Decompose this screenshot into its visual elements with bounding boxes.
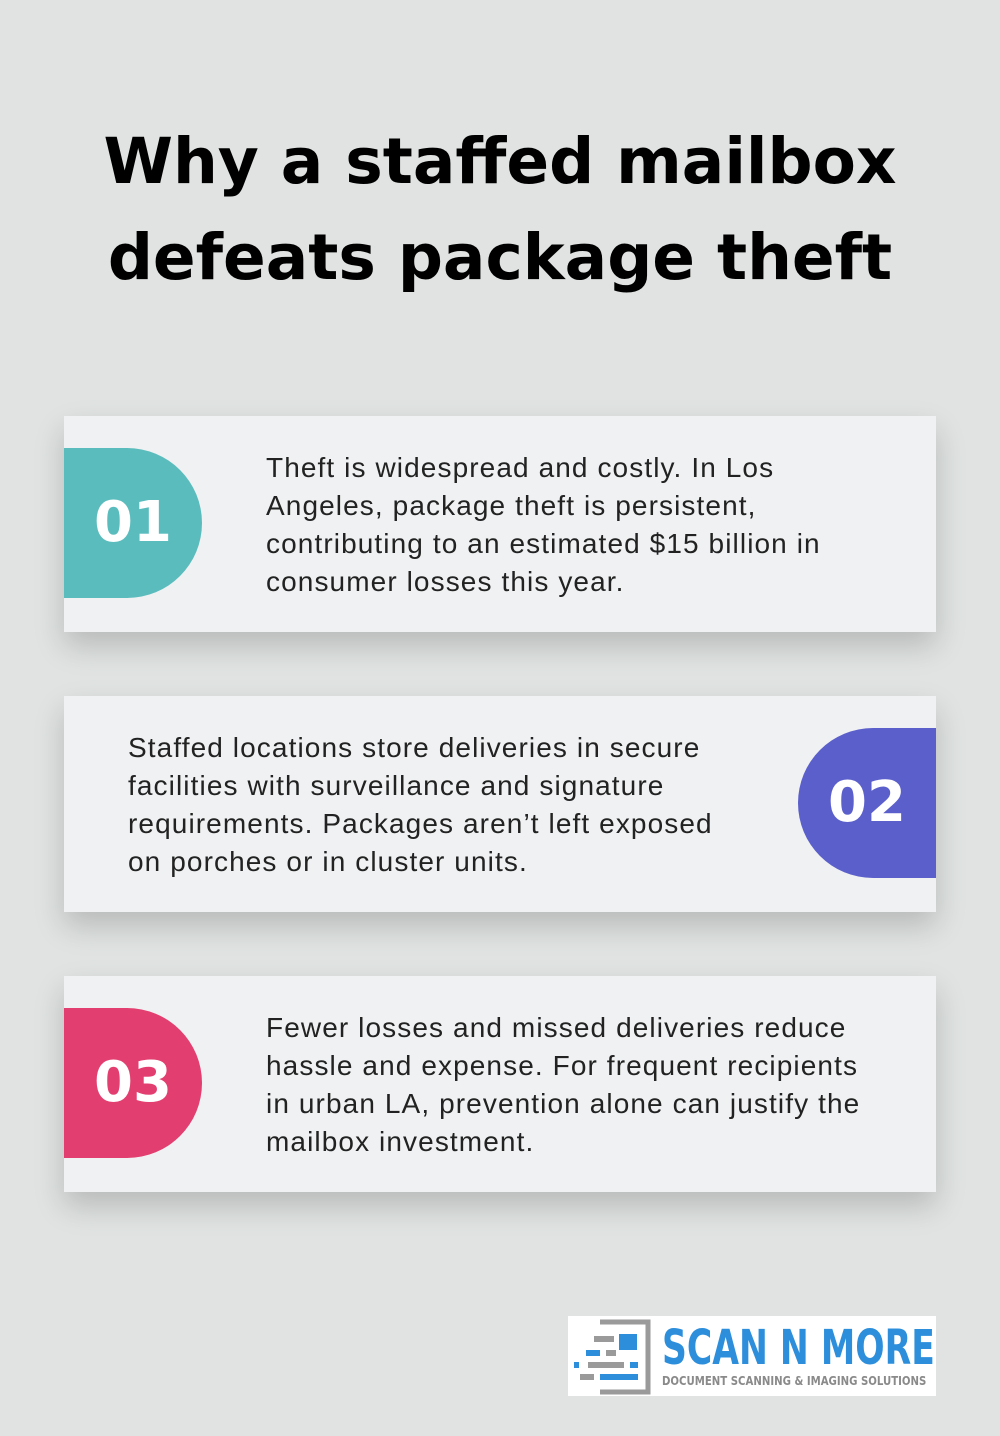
text block 3: in urban LA, prevention alone can justify the [266,1088,860,1119]
text block 1 [266,452,821,597]
text block 3 [266,1012,860,1157]
text block 1: consumer losses this year. [266,566,625,597]
text block 1: Theft is widespread and costly. In Los [266,452,774,483]
text block 1: Angeles, package theft is persistent, [266,490,757,521]
text block 2: Staffed locations store deliveries in secure [128,732,700,763]
title [103,125,897,294]
badge 02 [798,728,936,878]
logo [568,1316,936,1396]
title: Why a staffed mailbox [103,125,897,198]
text block 3: mailbox investment. [266,1126,534,1157]
logo text: SCAN N MORE [662,1320,935,1376]
text block 2: facilities with surveillance and signature [128,770,664,801]
text block 3: Fewer losses and missed deliveries reduce [266,1012,846,1043]
badge 03 [64,1008,202,1158]
panel: card 3 [64,976,936,1192]
badge 01: 01 [94,490,172,555]
badge 02: 02 [828,770,906,835]
text block 1: contributing to an estimated $15 billion in [266,528,821,559]
text block 2: on porches or in cluster units. [128,846,528,877]
text block 3: hassle and expense. For frequent recipients [266,1050,858,1081]
panel: card 1 [64,416,936,632]
logo text: DOCUMENT SCANNING & IMAGING SOLUTIONS [662,1374,926,1388]
text block 2: requirements. Packages aren’t left exposed [128,808,713,839]
badge 01 [64,448,202,598]
title: defeats package theft [108,221,892,294]
badge 03: 03 [94,1050,172,1115]
text block 2 [128,732,713,877]
panel: card 2 [64,696,936,912]
icon: scanner [574,1320,650,1394]
